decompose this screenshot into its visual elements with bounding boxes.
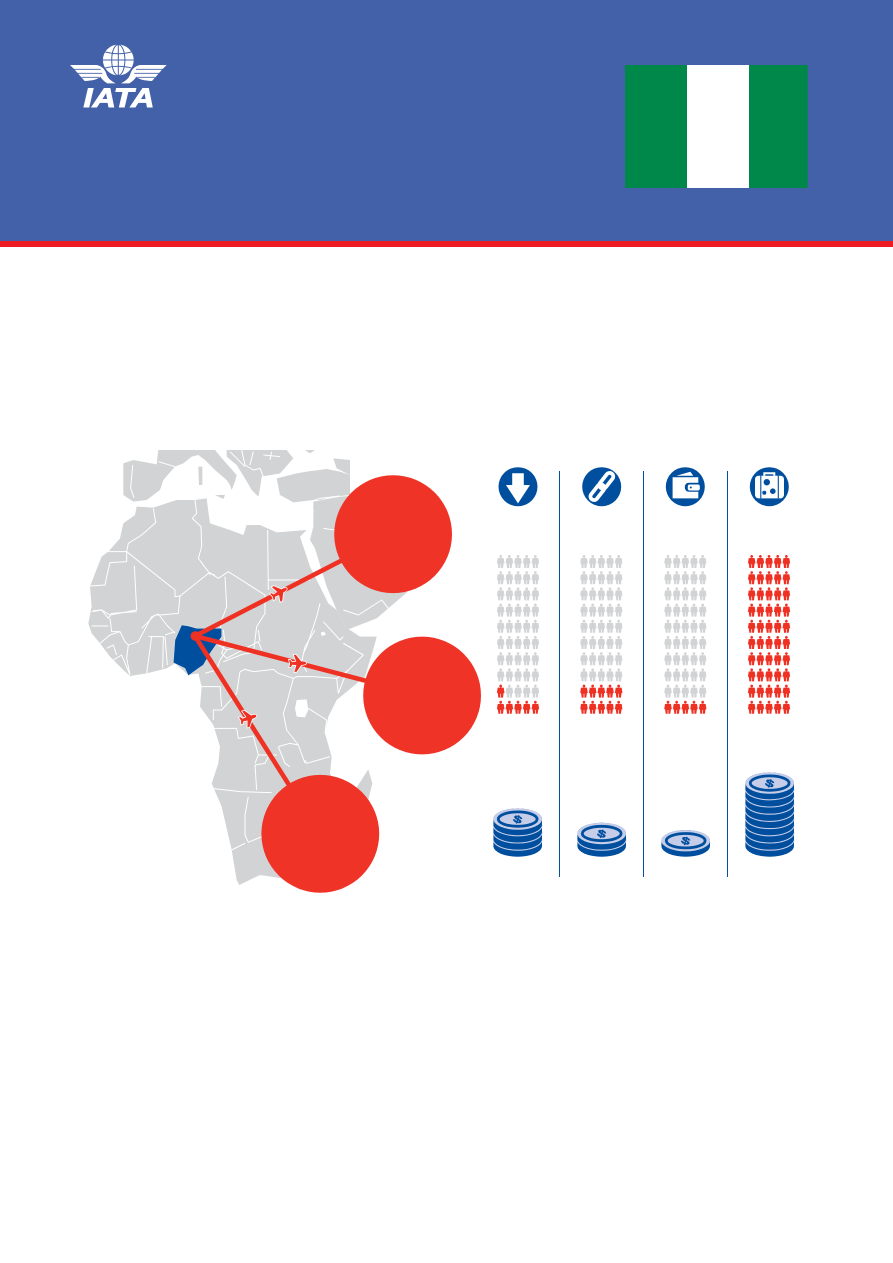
coin stack: column 1 — [493, 808, 542, 857]
people chart: column 4 — [748, 555, 790, 714]
destination circle east — [363, 637, 481, 754]
logo wings — [70, 65, 167, 83]
logo wordmark: IATA — [84, 83, 154, 113]
icon: wallet — [666, 467, 705, 506]
map of Africa — [88, 450, 417, 885]
people chart: column 3 — [664, 555, 706, 714]
plane icon south route — [237, 708, 259, 729]
destination circle south — [261, 775, 379, 893]
country borders — [90, 450, 388, 850]
origin dot on Nigeria — [190, 631, 200, 641]
icon: chain link — [582, 467, 621, 506]
route line to north-east destination — [195, 534, 393, 636]
people chart: column 1 — [497, 555, 539, 714]
icon: suitcase — [750, 467, 789, 506]
route line to south destination — [195, 636, 320, 834]
land masses — [88, 450, 417, 885]
coin stack: column 2 — [577, 823, 626, 857]
lake shapes — [295, 632, 326, 717]
plane icon east route — [289, 655, 306, 672]
header band — [0, 0, 893, 241]
route line to east destination — [195, 636, 422, 696]
red header rule — [0, 241, 893, 247]
icon: down arrow — [498, 467, 538, 506]
destination circle north-east — [334, 475, 452, 593]
Nigeria highlighted — [173, 625, 222, 676]
IATA logo — [70, 45, 167, 113]
logo globe — [103, 45, 134, 75]
coin stack: column 3 — [661, 830, 710, 857]
coin stack: column 4 — [745, 772, 794, 857]
Nigerian flag — [625, 65, 808, 188]
people chart: column 2 — [580, 555, 622, 714]
plane icon north-east route — [268, 581, 291, 604]
column dividers — [560, 471, 728, 877]
